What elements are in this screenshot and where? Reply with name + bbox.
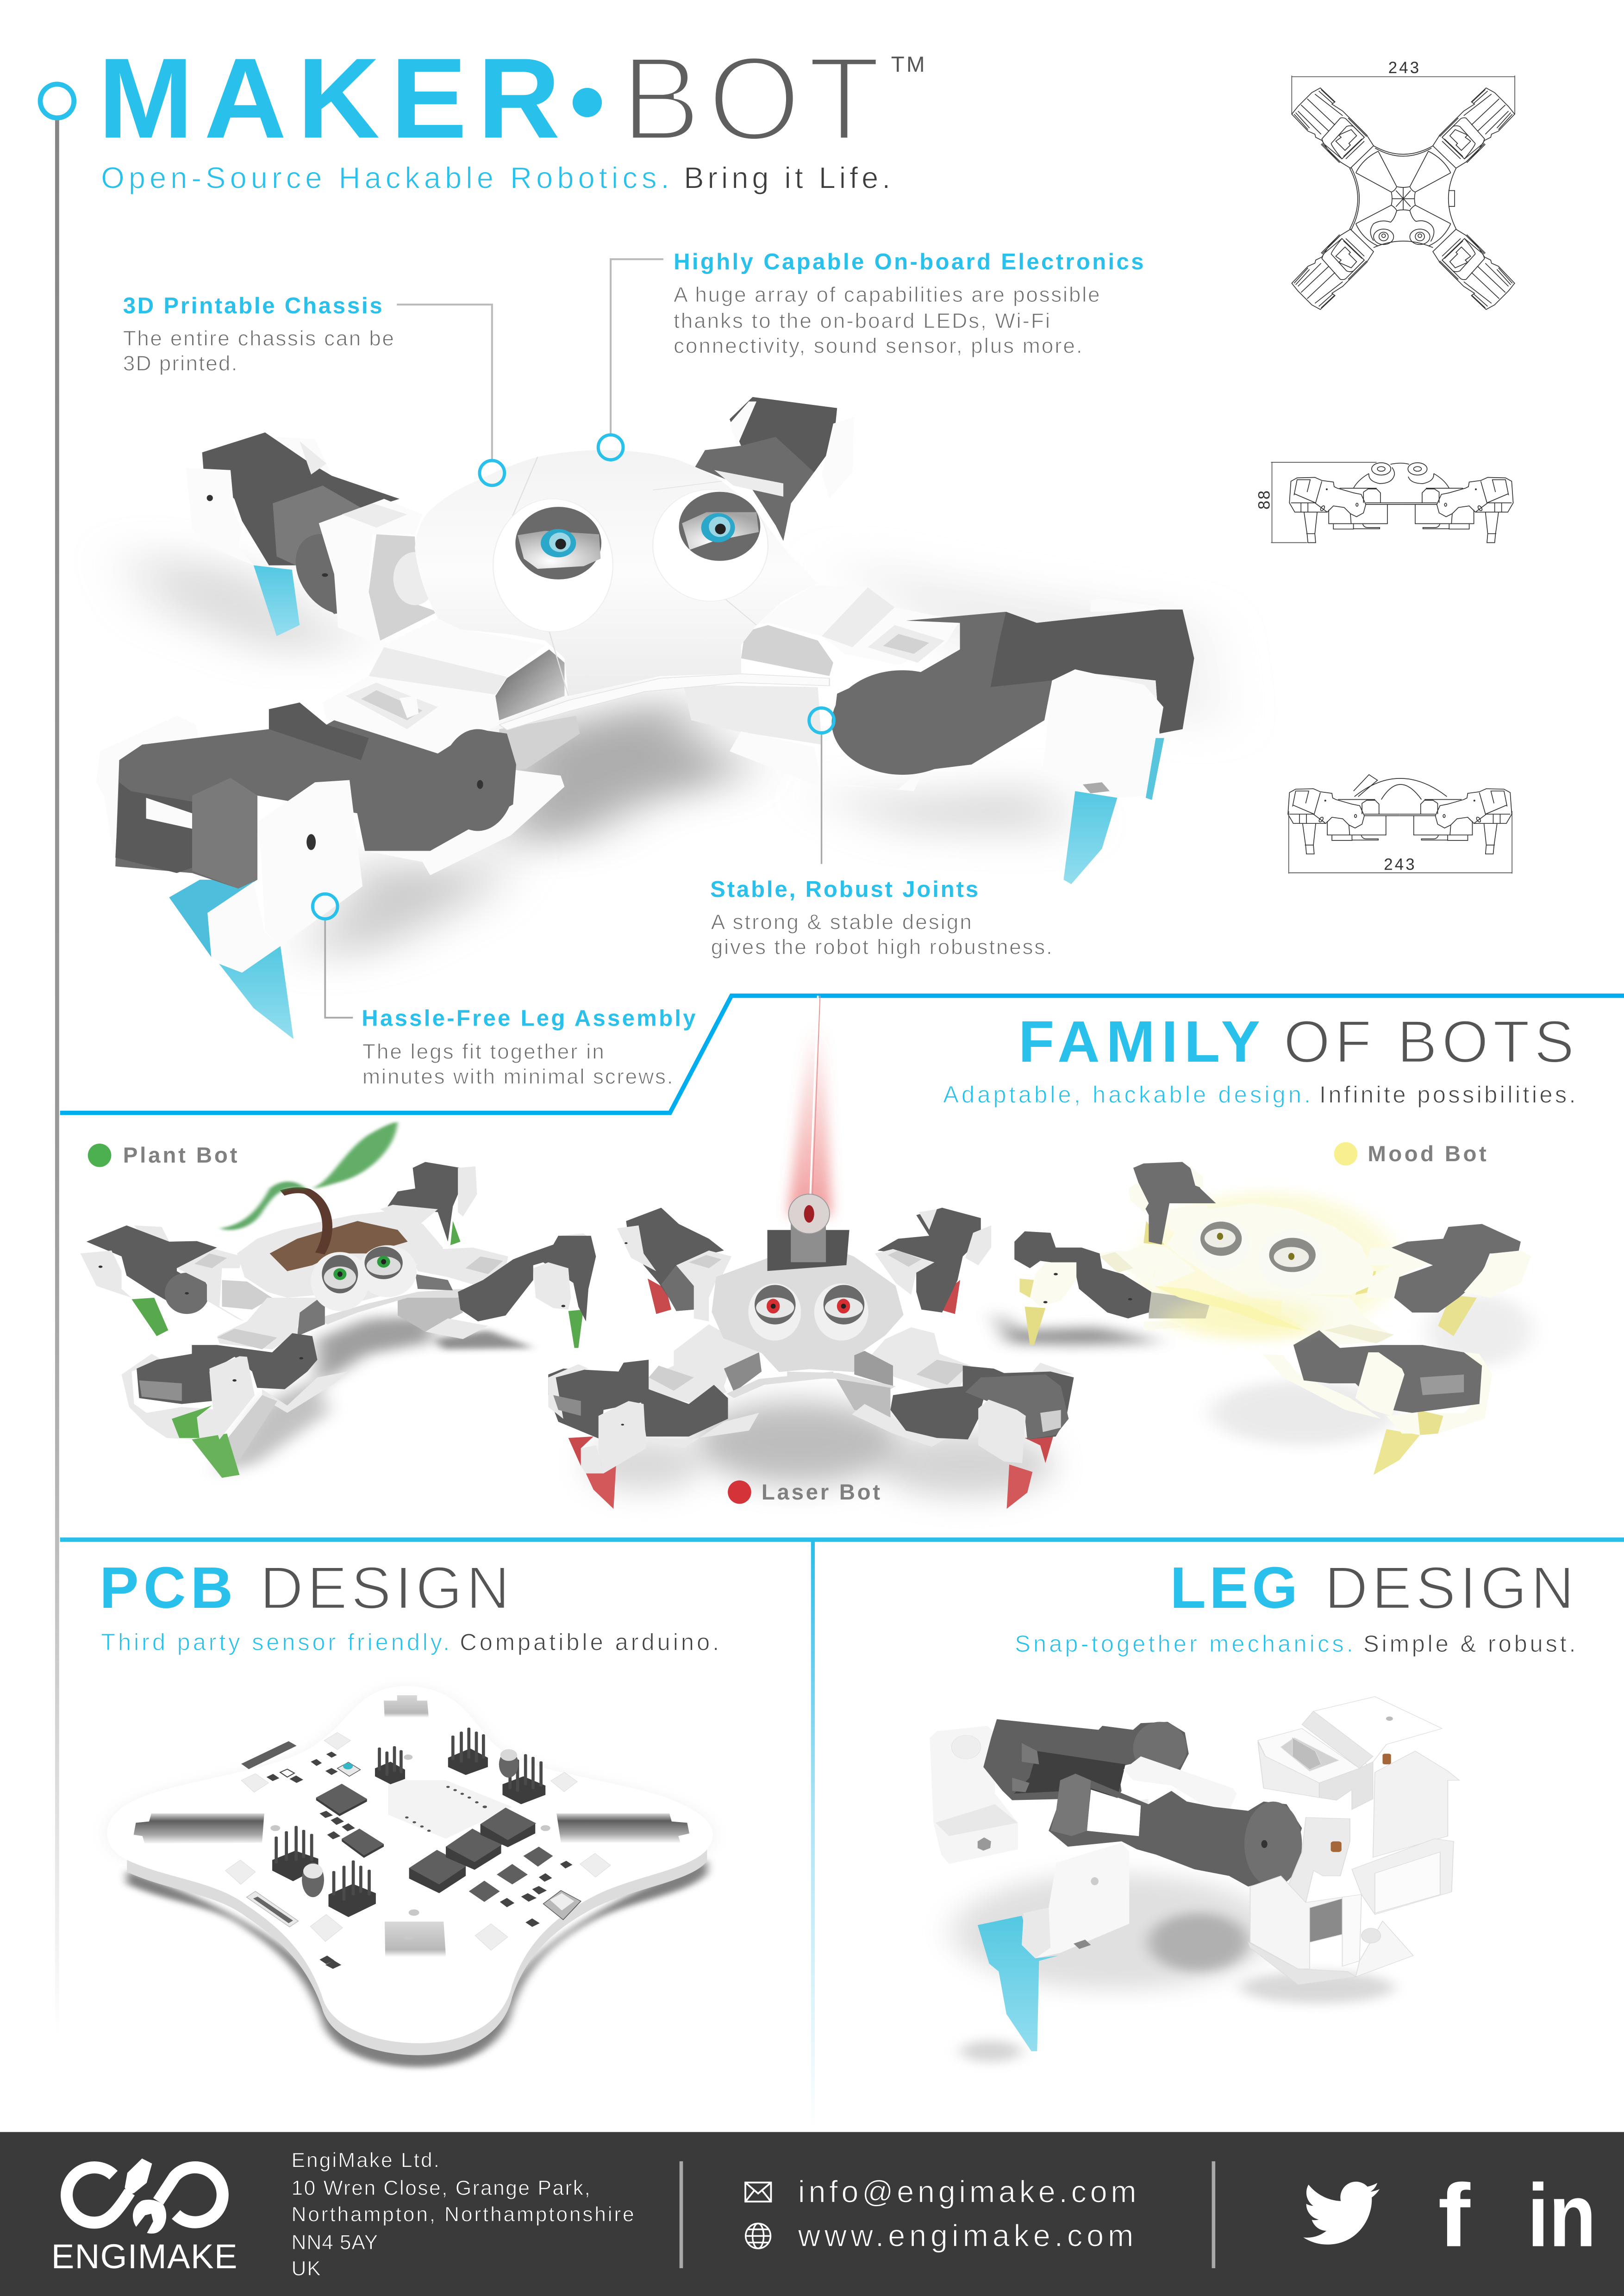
soil (269, 1221, 408, 1271)
icon: facebook: f (1438, 2165, 1471, 2265)
callout: on-board electronics (598, 249, 1143, 460)
upper right leg (695, 397, 854, 541)
right leg (832, 598, 1194, 884)
technical drawing: top view (1292, 75, 1515, 310)
section dividers (60, 1537, 1624, 2126)
laser beam (788, 996, 832, 1215)
heading: family of bots (1018, 1008, 1574, 1075)
subtitle: Bring it Life. (684, 161, 890, 195)
callout: leg assembly: The legs fit together in (362, 1039, 604, 1064)
subheading: family: Infinite possibilities. (1319, 1081, 1576, 1108)
front-left arm (323, 618, 564, 753)
right leaf (312, 1122, 398, 1188)
icon: email (745, 2183, 771, 2202)
callout: on-board electronics: thanks to the on-board LEDs, Wi-Fi (674, 309, 1050, 333)
subheading: family: Adaptable, hackable design. (943, 1081, 1311, 1108)
left socket frame (319, 499, 438, 645)
heading: leg design (1170, 1555, 1574, 1622)
title (98, 31, 925, 165)
subheading: pcb: Compatible arduino. (460, 1629, 719, 1655)
title: TM (891, 52, 925, 77)
mood shadow (994, 1295, 1531, 1445)
label: plant bot: Plant Bot (123, 1143, 237, 1168)
plant bot eyes (311, 1245, 417, 1311)
heading: leg design: DESIGN (1324, 1555, 1574, 1622)
main robot render (96, 397, 1213, 1039)
address: UK (291, 2258, 321, 2280)
subtitle: Open-Source Hackable Robotics. (101, 161, 669, 195)
icon: linkedin: in (1527, 2165, 1596, 2265)
leg design render (930, 1697, 1459, 2062)
laser bot right eye (814, 1283, 868, 1341)
callout: on-board electronics: Highly Capable On-board Electronics (674, 249, 1143, 274)
heading: pcb design: DESIGN (260, 1555, 510, 1622)
callout: leg assembly: Hassle-Free Leg Assembly (362, 1006, 696, 1031)
laser post (768, 1194, 849, 1271)
logo: engimake (51, 2159, 237, 2276)
under-body blocks (365, 674, 925, 875)
callout: 3D printable chassis: The entire chassis can be (123, 326, 394, 350)
mood glow (1138, 1191, 1397, 1339)
left leaf (219, 1182, 307, 1230)
callout: leg assembly (312, 894, 696, 1088)
callout: on-board electronics: A huge array of capabilities are possible (674, 282, 1100, 306)
callout: stable joints (710, 708, 1052, 958)
technical drawing: front view (1271, 462, 1513, 543)
heading: leg design: LEG (1170, 1555, 1298, 1620)
icon: globe (746, 2223, 770, 2248)
logo: engimake: ENGIMAKE (51, 2237, 237, 2276)
plant lower left leg (122, 1333, 348, 1478)
laser bot dome (712, 1240, 904, 1372)
callout: stable joints: gives the robot high robustness. (711, 934, 1052, 958)
callout: stable joints: Stable, Robust Joints (710, 877, 978, 902)
dimension label: 243 top: 243 (1388, 59, 1419, 77)
plant bot (81, 1122, 596, 1478)
callout: on-board electronics: connectivity, sound sensor, plus more. (674, 333, 1082, 358)
address: NN4 5AY (291, 2231, 378, 2254)
white socket assembly (1248, 1697, 1459, 1985)
pcb render (107, 1686, 713, 2067)
spine line with ring (40, 84, 74, 2035)
mood bot (994, 1162, 1531, 1475)
footer (0, 2132, 1624, 2296)
lower left leg (96, 703, 516, 1039)
dimension label: 243 bottom: 243 (1384, 856, 1415, 873)
subheading: family (943, 1081, 1576, 1108)
address (291, 2149, 634, 2280)
left eye (493, 499, 613, 632)
section border: family of bots (60, 996, 1624, 1113)
callout: 3D printable chassis: 3D printed. (123, 351, 237, 375)
plant stem (282, 1190, 327, 1253)
label: mood bot: Mood Bot (1368, 1142, 1487, 1166)
right leg disk (832, 670, 973, 775)
address: EngiMake Ltd. (291, 2149, 439, 2172)
upper left leg (186, 432, 400, 636)
callout: stable joints: A strong & stable design (711, 909, 972, 933)
technical drawing: rear view (1288, 775, 1512, 874)
callout: leg assembly: minutes with minimal screws. (362, 1064, 673, 1088)
dimension label: 88: 88 (1256, 491, 1274, 510)
mood overlay glow (1164, 1298, 1319, 1339)
heading: pcb design: PCB (100, 1555, 233, 1620)
callout: 3D printable chassis (123, 293, 505, 485)
mood eyes (1193, 1220, 1323, 1289)
contact: email: info@engimake.com (798, 2175, 1137, 2209)
plant right leg (458, 1233, 596, 1348)
address: 10 Wren Close, Grange Park, (291, 2177, 590, 2200)
icon: twitter (1303, 2182, 1380, 2245)
heading: family of bots: OF BOTS (1284, 1008, 1574, 1075)
contact: web: www.engimake.com (798, 2219, 1133, 2253)
heading: family of bots: FAMILY (1018, 1008, 1260, 1074)
label: laser bot: Laser Bot (762, 1480, 880, 1505)
heading: pcb design (100, 1555, 510, 1622)
laser bot (548, 996, 1074, 1509)
subheading: leg: Simple & robust. (1363, 1630, 1576, 1657)
right eye (653, 490, 768, 601)
callout: 3D printable chassis: 3D Printable Chassis (123, 293, 382, 318)
laser bot left eye (748, 1283, 801, 1341)
right arm (741, 585, 960, 676)
title: MAKER (98, 35, 560, 162)
dome (415, 450, 818, 696)
subheading: leg (1015, 1630, 1576, 1657)
address: Northampton, Northamptonshire (291, 2203, 634, 2226)
title: BOT (621, 31, 881, 165)
subheading: pcb: Third party sensor friendly. (101, 1629, 450, 1655)
subheading: pcb (101, 1629, 719, 1655)
subheading: leg: Snap-together mechanics. (1015, 1630, 1353, 1657)
